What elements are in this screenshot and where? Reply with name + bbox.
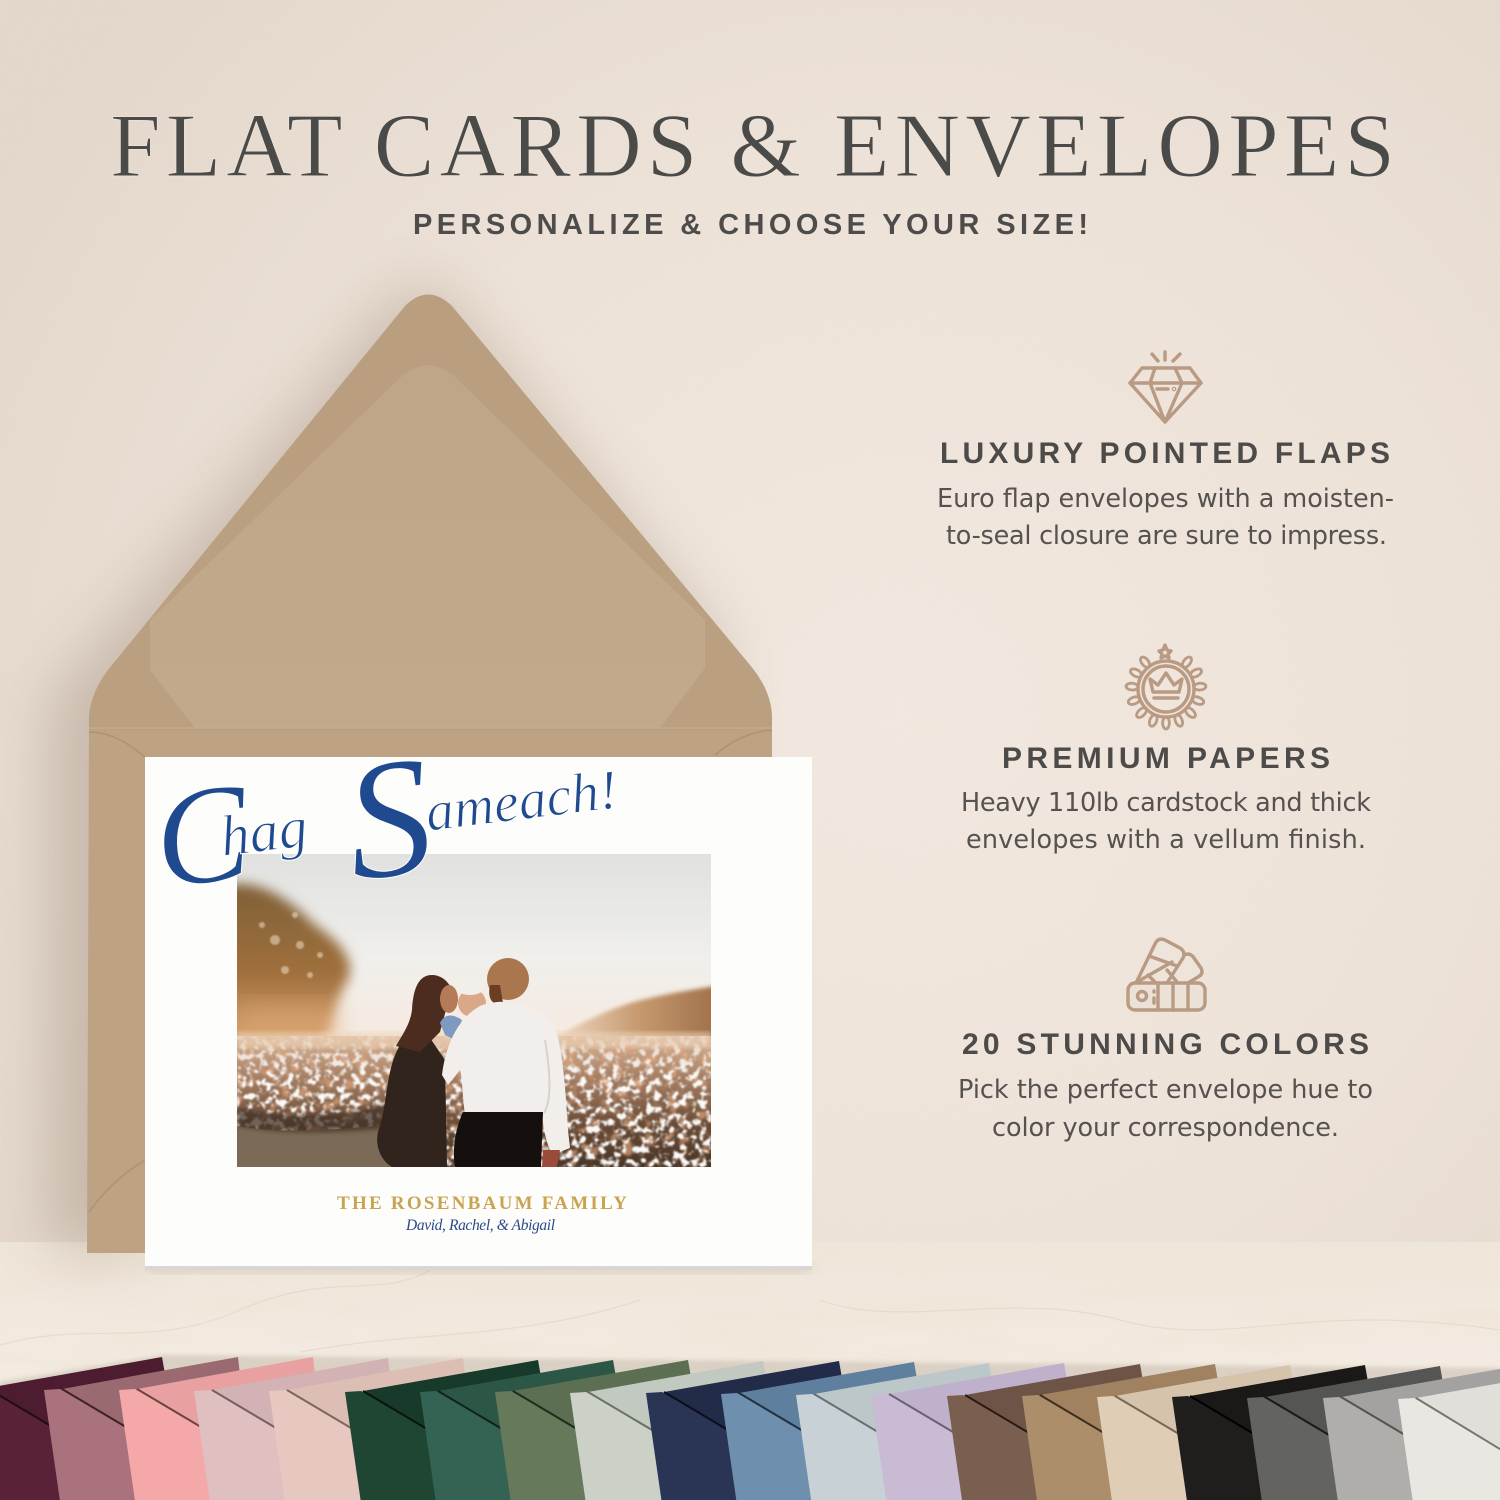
- description: [958, 1075, 1373, 1143]
- swatch 8: olive green: [495, 1360, 691, 1500]
- greeting: C: [146, 753, 259, 919]
- greeting: ameach!: [422, 759, 621, 844]
- swatch 1: burgundy: [0, 1357, 165, 1500]
- description: [961, 788, 1371, 855]
- greeting: hag: [217, 792, 325, 869]
- subtitle: PERSONALIZE & CHOOSE YOUR SIZE!: [413, 209, 1088, 241]
- marble floor: [0, 1242, 1500, 1500]
- swatch 13: lilac: [871, 1363, 1067, 1500]
- swatch 2: mauve: [44, 1357, 240, 1500]
- heading: PREMIUM PAPERS: [1002, 742, 1330, 775]
- swatch 15: tan: [1022, 1364, 1218, 1500]
- description: envelopes with a vellum finish.: [966, 825, 1366, 855]
- description: color your correspondence.: [992, 1113, 1339, 1143]
- swatch 17: black: [1172, 1365, 1368, 1500]
- swatch 4: dusty rose: [194, 1358, 390, 1500]
- envelope body: [87, 730, 772, 1253]
- tree: [225, 884, 350, 1048]
- photo: family in cotton field: [225, 854, 725, 1167]
- swatch 7: teal green: [420, 1360, 616, 1500]
- cotton field: [237, 1032, 711, 1167]
- man: [442, 958, 570, 1167]
- distant trees: [560, 983, 711, 1036]
- greeting: S: [335, 720, 442, 917]
- tan envelope: [87, 294, 772, 1253]
- woman: [377, 975, 462, 1167]
- icon: diamond: [1130, 352, 1201, 422]
- names: David, Rachel, & Abigail: [405, 1217, 555, 1234]
- swatch 20: off white: [1398, 1367, 1500, 1500]
- colour swatches shadow: [0, 1355, 1500, 1500]
- swatch 12: pale blue: [796, 1363, 992, 1500]
- icon: crown badge: [1126, 645, 1206, 729]
- greeting: [164, 761, 612, 884]
- envelope colour swatches: [0, 1357, 1500, 1500]
- swatch 18: charcoal: [1247, 1366, 1443, 1500]
- feature: stunning colors: [958, 939, 1373, 1143]
- swatch 5: pale rose: [269, 1358, 465, 1500]
- baby: [458, 992, 486, 1016]
- feature: luxury pointed flaps: [937, 352, 1394, 551]
- icon: colour swatch fan: [1128, 939, 1205, 1010]
- swatch 6: forest green: [345, 1360, 541, 1500]
- title: FLAT CARDS & ENVELOPES: [110, 95, 1395, 196]
- swatch 19: grey: [1323, 1366, 1500, 1500]
- description: to-seal closure are sure to impress.: [946, 521, 1387, 551]
- envelope shadow: [50, 290, 720, 1250]
- description: Pick the perfect envelope hue to: [958, 1075, 1373, 1105]
- swatch 3: blush pink: [119, 1357, 315, 1500]
- swatch 9: sage: [570, 1361, 766, 1500]
- family name: THE ROSENBAUM FAMILY: [337, 1193, 627, 1214]
- heading: LUXURY POINTED FLAPS: [940, 437, 1390, 470]
- description: [937, 484, 1394, 551]
- envelope flap: [89, 294, 772, 760]
- card shadow: [150, 1262, 810, 1272]
- description: Euro flap envelopes with a moisten-: [937, 484, 1394, 514]
- heading: 20 STUNNING COLORS: [962, 1028, 1369, 1061]
- feature: premium papers: [961, 645, 1371, 855]
- swatch 10: navy: [646, 1361, 842, 1500]
- swatch 11: steel blue: [721, 1362, 917, 1500]
- swatch 16: cream: [1097, 1365, 1293, 1500]
- flap liner: [150, 365, 705, 728]
- flat card: [145, 757, 812, 1270]
- envelope folds: [89, 730, 772, 1212]
- dirt path: [237, 1124, 392, 1167]
- description: Heavy 110lb cardstock and thick: [961, 788, 1371, 818]
- swatch 14: chocolate: [947, 1364, 1143, 1500]
